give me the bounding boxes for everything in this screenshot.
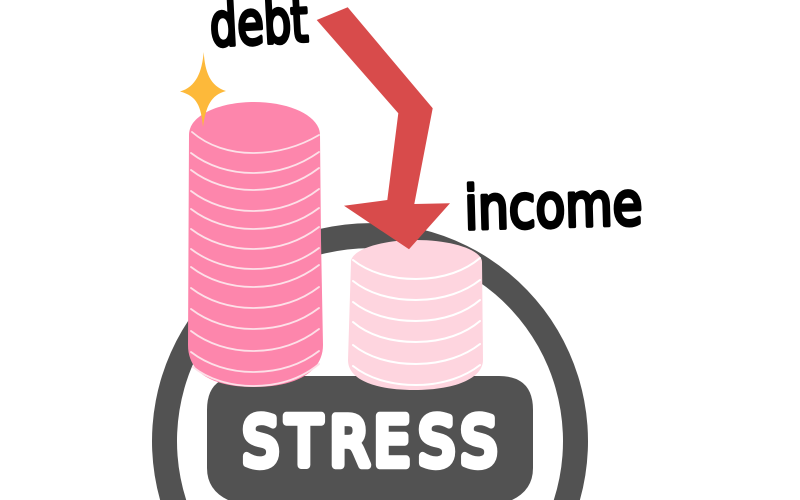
arrow: debt falling onto income bbox=[317, 7, 450, 249]
stress label: S bbox=[419, 403, 455, 481]
stress label: S bbox=[461, 403, 497, 481]
stress label: E bbox=[374, 403, 410, 481]
stress label: S bbox=[243, 403, 279, 481]
stress label: R bbox=[330, 403, 369, 481]
tall pink stack: debt bbox=[188, 102, 323, 387]
short light pink stack: income bbox=[348, 240, 483, 390]
icon: gold sparkle bbox=[180, 52, 226, 127]
stress ring bbox=[152, 223, 588, 500]
stress label: T bbox=[286, 403, 322, 481]
stress badge bbox=[207, 376, 533, 500]
label: income: income bbox=[464, 169, 643, 244]
